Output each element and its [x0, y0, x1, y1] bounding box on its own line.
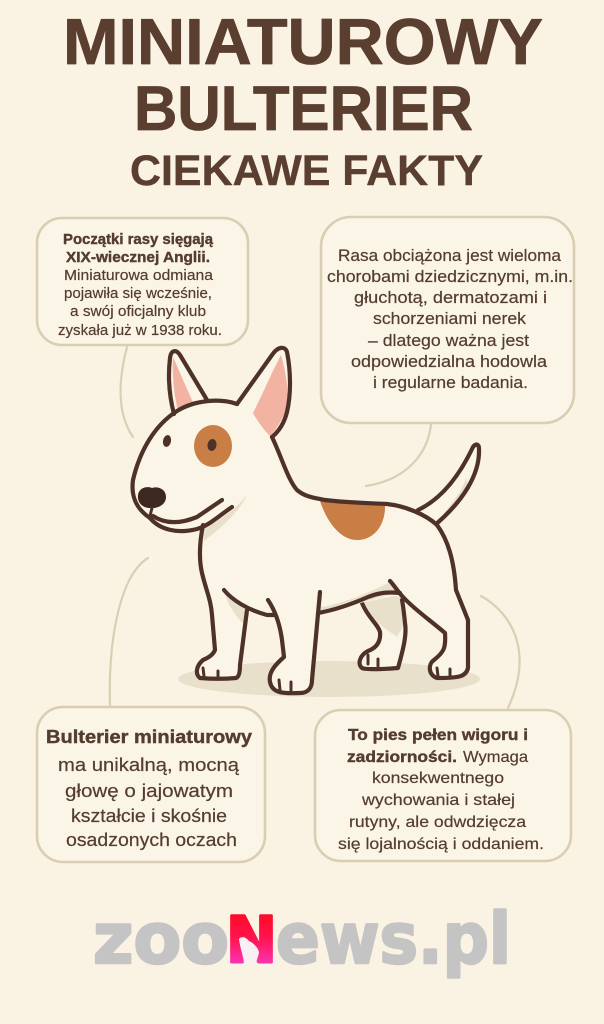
panel: head shape: głowę o jajowatym	[65, 781, 233, 801]
connector: temperament box to dog	[481, 596, 520, 708]
panel: temperament: rutyny, ale odwdzięcza	[349, 814, 526, 831]
ground shadow	[178, 661, 480, 697]
dog outline	[169, 351, 207, 414]
panel: origins of the breed: zyskała już w 1938 roku.	[58, 322, 222, 339]
illustration: bull terrier dog	[133, 348, 480, 697]
panel: head shape: kształcie i skośnie	[71, 806, 227, 826]
logo letter N: N	[226, 904, 277, 977]
panel: head shape: ma unikalną, mocną	[58, 755, 240, 775]
panel: origins of the breed: Miniaturowa odmiana	[64, 267, 214, 284]
logo dog icon	[239, 937, 259, 963]
belly shading	[224, 590, 248, 627]
panel: head shape	[37, 707, 265, 862]
title: BULTERIER	[134, 74, 473, 144]
logo: zooNews.pl: ews.pl	[276, 898, 511, 980]
tail	[418, 445, 479, 525]
panel: origins of the breed: pojawiła się wcześnie,	[64, 285, 212, 302]
panel: head shape: osadzonych oczach	[66, 830, 237, 850]
panel: hereditary health problems: odpowiedzialna hodowla	[351, 353, 548, 371]
panel: temperament	[315, 710, 571, 861]
nose	[138, 487, 166, 508]
panel: origins of the breed	[37, 218, 248, 345]
ears pink inner	[173, 357, 193, 411]
subtitle: CIEKAWE FAKTY	[130, 147, 483, 195]
title: MINIATUROWY	[63, 6, 543, 78]
eyes	[162, 434, 172, 448]
panel: temperament: To pies pełen wigoru i	[348, 727, 528, 744]
toes	[203, 668, 450, 691]
connector: health box to dog	[366, 424, 431, 486]
logo: zooNews.pl: zoo	[93, 898, 229, 980]
panel: hereditary health problems: Rasa obciążona jest wieloma	[338, 247, 562, 265]
panel: temperament: zadziorności.	[347, 749, 457, 766]
ear spot	[194, 425, 232, 467]
panel: hereditary health problems: – dlatego ważna jest	[368, 332, 529, 350]
left ear	[169, 351, 207, 414]
panel: hereditary health problems: głuchotą, dermatozami i	[354, 289, 547, 307]
panel: hereditary health problems: chorobami dziedzicznymi, m.in.	[327, 268, 573, 286]
panel: temperament: się lojalnością i oddaniem.	[338, 836, 544, 853]
panel: hereditary health problems	[321, 217, 574, 423]
panel: hereditary health problems: i regularne badania.	[373, 374, 528, 392]
far hind leg	[360, 596, 406, 669]
panel: origins of the breed: Początki rasy sięgają	[63, 231, 214, 248]
title	[63, 6, 543, 195]
connector: history box to dog	[120, 347, 133, 437]
body and head silhouette	[133, 350, 468, 694]
panel: origins of the breed: XIX-wiecznej Anglii.	[66, 249, 210, 266]
panel: head shape: Bulterier miniaturowy	[46, 727, 252, 747]
connector: head box to dog	[110, 558, 148, 705]
panel: temperament: wychowania i stałej	[361, 792, 515, 809]
panel: origins of the breed: a swój oficjalny klub	[70, 303, 206, 320]
panel: hereditary health problems: schorzeniami nerek	[373, 310, 527, 328]
panel: temperament: konsekwentnego	[372, 770, 504, 787]
panel: temperament: Wymaga	[463, 749, 528, 766]
back patch	[320, 501, 385, 540]
under-chin shading	[203, 495, 247, 541]
logo: zooNews.pl	[93, 898, 511, 980]
